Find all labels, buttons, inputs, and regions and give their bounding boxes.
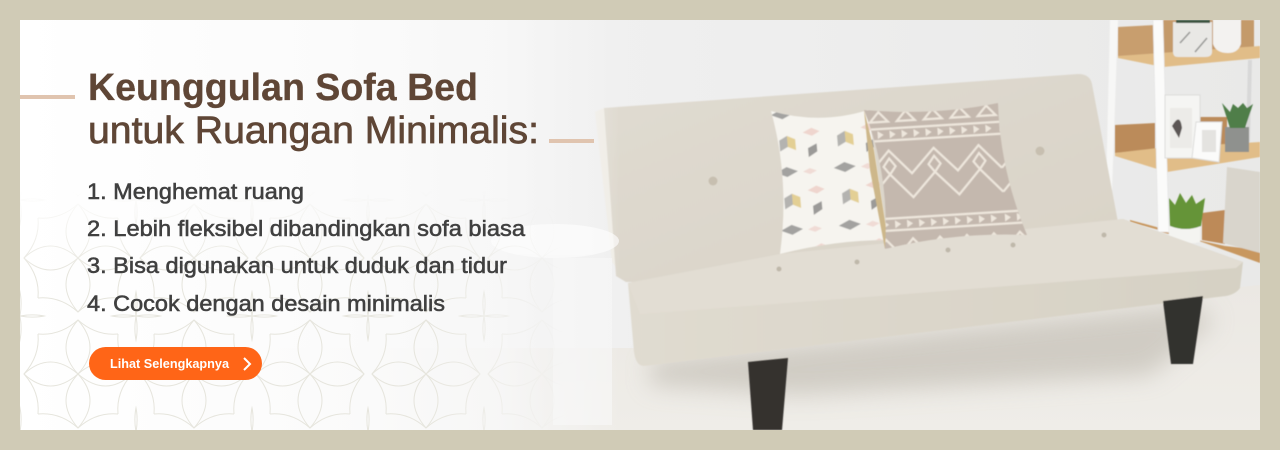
item 4: 4. Cocok dengan desain minimalis [87, 291, 445, 316]
picture frames [1165, 95, 1200, 158]
pillow shade edge [864, 110, 888, 249]
seat top [895, 220, 1242, 294]
floor shadow under sofa [650, 305, 1215, 395]
right shelf post [1246, 60, 1252, 142]
white ceramic pot [1213, 20, 1241, 53]
backrest side [602, 110, 614, 264]
storage box [1223, 167, 1260, 253]
sofa backrest [604, 74, 1118, 282]
tribal print [864, 103, 1027, 249]
decorative lattice pattern [20, 210, 520, 430]
title line 1: Keunggulan Sofa Bed [88, 67, 478, 109]
item 3: 3. Bisa digunakan untuk duduk dan tidur [87, 253, 507, 278]
button label: Lihat Selengkapnya [110, 356, 230, 371]
icon: chevron [244, 358, 250, 370]
floor [508, 348, 1260, 430]
geometric print [772, 112, 882, 246]
accent line left [20, 95, 75, 99]
title line 2: untuk Ruangan Minimalis: [88, 110, 539, 152]
left white fade [20, 20, 554, 430]
table stand [585, 258, 612, 425]
shelf uprights [1106, 20, 1118, 190]
item 2: 2. Lebih fleksibel dibandingkan sofa biasa [87, 216, 526, 241]
shelf boards [1118, 46, 1260, 67]
accent line right [549, 139, 594, 143]
seat buttons [776, 266, 782, 272]
pillow base [771, 110, 888, 254]
small plant pot [1169, 226, 1200, 244]
sofa bed [595, 74, 1243, 430]
small plant [1169, 193, 1205, 229]
back tufting buttons [708, 176, 718, 186]
sofa back leg left [632, 316, 664, 354]
button [89, 347, 262, 380]
shelf back panels [1118, 25, 1155, 58]
table top [588, 227, 619, 254]
front right leg [1163, 296, 1203, 364]
benefits list [87, 179, 526, 316]
pillow: geometric [771, 110, 888, 254]
faded side table [585, 227, 619, 425]
pillow: tribal [864, 103, 1027, 249]
potted plant [1225, 127, 1249, 152]
wall [504, 20, 1260, 348]
item 1: 1. Menghemat ruang [87, 179, 304, 204]
title [88, 67, 539, 152]
wooden shelf unit [1106, 20, 1260, 263]
button pill [89, 347, 262, 380]
marble vase [1173, 22, 1212, 57]
front left leg [748, 358, 788, 430]
seat cushion [628, 262, 1244, 366]
